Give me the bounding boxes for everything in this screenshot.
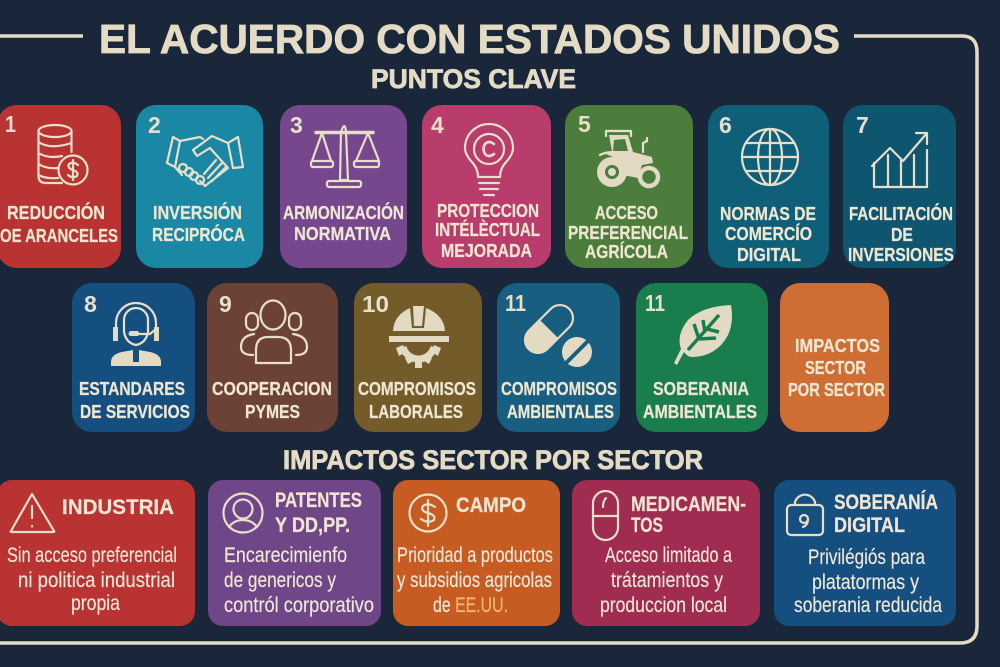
panel: industria: [0, 480, 195, 626]
icon: pills: [518, 299, 592, 367]
panel text: Acceso limitado a: [605, 544, 732, 567]
panel: patentes: [208, 480, 381, 626]
card 11b: soberanía ambientales: AMBIENTALES: [643, 401, 757, 422]
panel text: Prioridad a productos: [397, 544, 553, 567]
panel: campo: [393, 480, 560, 626]
label: PROTECCION: [437, 200, 539, 221]
card 10: compromisos laborales: [354, 283, 482, 432]
number 1: 1: [5, 111, 16, 137]
panel: soberanía digital: [774, 480, 956, 626]
card 2: inversión recíproca: RECIPRÓCA: [152, 224, 245, 245]
card 4: protección intelectual: MEJORADA: [441, 240, 532, 261]
label: COOPERACION: [212, 378, 332, 399]
panel: soberanía digital: DIGITAL: [834, 513, 905, 537]
card 5: acceso preferencial agrícola: PREFERENCIAL: [568, 222, 688, 243]
label: REDUCCIÓN: [7, 202, 105, 223]
panel: medicamentos: [572, 480, 760, 626]
number 10: 10: [362, 291, 389, 317]
panel heading: SOBERANÍA: [834, 489, 938, 514]
label: ARMONIZACIÓN: [283, 202, 404, 223]
panel: industria: propia: [71, 592, 120, 615]
card 2: inversión recíproca: [136, 105, 263, 268]
card 6: normas de comercio digital: COMERCÍO: [725, 223, 812, 244]
card 6: normas de comercio digital: DIGITAL: [737, 244, 801, 265]
panel: campo: y subsidios agricolas: [397, 569, 552, 592]
icon: padlock: [787, 495, 823, 535]
panel heading: INDUSTRIA: [62, 495, 174, 519]
label: ESTANDARES: [79, 378, 185, 399]
card 9: cooperación pymes: [207, 283, 338, 432]
title: EL ACUERDO CON ESTADOS UNIDOS: [99, 16, 840, 62]
card 1: reducción de aranceles: OE ARANCELES: [0, 225, 118, 246]
number 11: 11: [505, 290, 526, 316]
label: COMPROMISOS: [501, 378, 617, 399]
icon: scales: [311, 126, 379, 187]
card 5: acceso preferencial agrícola: [565, 105, 693, 268]
panel: campo: de EE.UU.: [433, 594, 508, 617]
panel text: Sin acceso preferencial: [7, 544, 177, 567]
number 3: 3: [290, 112, 303, 138]
panel: patentes: Y DD,PP.: [275, 513, 350, 537]
icon: light bulb: [465, 124, 513, 195]
card 11: compromisos ambientales: AMBIENTALES: [507, 401, 614, 422]
icon: headset agent: [111, 303, 161, 366]
icon: leaf: [674, 305, 732, 365]
card: impactos sector por sector: POR SECTOR: [788, 379, 885, 400]
card 4: protección intelectual: [422, 105, 551, 268]
panel: industria: ni politica industrial: [18, 569, 175, 592]
card: impactos sector por sector: SECTOR: [805, 357, 866, 378]
number 6: 6: [719, 112, 732, 138]
panel: medicamentos: produccion local: [600, 594, 727, 617]
icon: warning triangle: [11, 494, 54, 532]
card 7: facilitación de inversiones: INVERSIONES: [848, 244, 954, 265]
card 4: protección intelectual: INTÉLÈCTUAL: [435, 219, 540, 240]
card 11: compromisos ambientales: [497, 283, 620, 432]
panel heading: PATENTES: [275, 488, 362, 512]
label: NORMAS DE: [720, 203, 816, 224]
panel: soberanía digital: platatormas y: [812, 571, 919, 594]
label: FACILITACIÓN: [849, 203, 953, 224]
panel text: Encarecimienfo: [224, 544, 347, 567]
card 8: estándares de servicios: DE SERVICIOS: [80, 401, 190, 422]
card 9: cooperación pymes: PYMES: [245, 401, 300, 422]
icon: group of people: [241, 300, 307, 363]
card 3: armonización normativa: [280, 105, 407, 268]
icon: helmet and gear: [389, 306, 449, 368]
icon: tractor: [597, 131, 658, 187]
panel heading: MEDICAMEN-: [631, 492, 746, 516]
icon: growth chart: [872, 133, 927, 187]
label: IMPACTOS: [795, 335, 880, 356]
card 6: normas de comercio digital: [708, 105, 829, 268]
icon: coins: [38, 125, 88, 184]
number 11: 11: [645, 290, 665, 316]
icon: capsule: [593, 491, 618, 540]
panel heading: CAMPO: [456, 493, 526, 517]
icon: handshake: [167, 136, 243, 186]
heading: impactos sector por sector: IMPACTOS SECTOR POR SECTOR: [283, 445, 703, 475]
card 3: armonización normativa: NORMATIVA: [294, 223, 391, 244]
card 5: acceso preferencial agrícola: AGRÍCOLA: [585, 241, 668, 262]
number 9: 9: [219, 291, 232, 317]
panel: medicamentos: trátamientos y: [611, 569, 723, 592]
panel: soberanía digital: soberania reducida: [794, 594, 942, 617]
number 5: 5: [578, 111, 591, 137]
subtitle: puntos clave: PUNTOS CLAVE: [371, 64, 576, 94]
panel: patentes: contról corporativo: [224, 594, 374, 617]
panel: patentes: de genericos y: [224, 569, 336, 592]
card 8: estándares de servicios: [72, 283, 195, 432]
label: COMPROMISOS: [358, 378, 476, 399]
card 7: facilitación de inversiones: [843, 105, 956, 268]
card 7: facilitación de inversiones: DE: [891, 224, 913, 245]
card 10: compromisos laborales: LABORALES: [369, 401, 463, 422]
icon: person in circle: [224, 494, 262, 532]
label: ACCESO: [595, 202, 658, 223]
icon: dollar circle: [410, 494, 446, 532]
label: INVERSIÓN: [153, 202, 242, 223]
number 4: 4: [431, 112, 444, 138]
panel: medicamentos: TOS: [631, 513, 663, 537]
panel text: Privilégiós para: [808, 546, 925, 569]
card: impactos sector por sector: [780, 283, 889, 432]
card 1: reducción de aranceles: [0, 105, 121, 268]
icon: globe: [742, 129, 798, 185]
label: SOBERANIA: [653, 378, 749, 399]
number 8: 8: [84, 291, 97, 317]
number 2: 2: [148, 112, 161, 138]
card 11b: soberanía ambientales: [636, 283, 768, 432]
number 7: 7: [856, 112, 869, 138]
